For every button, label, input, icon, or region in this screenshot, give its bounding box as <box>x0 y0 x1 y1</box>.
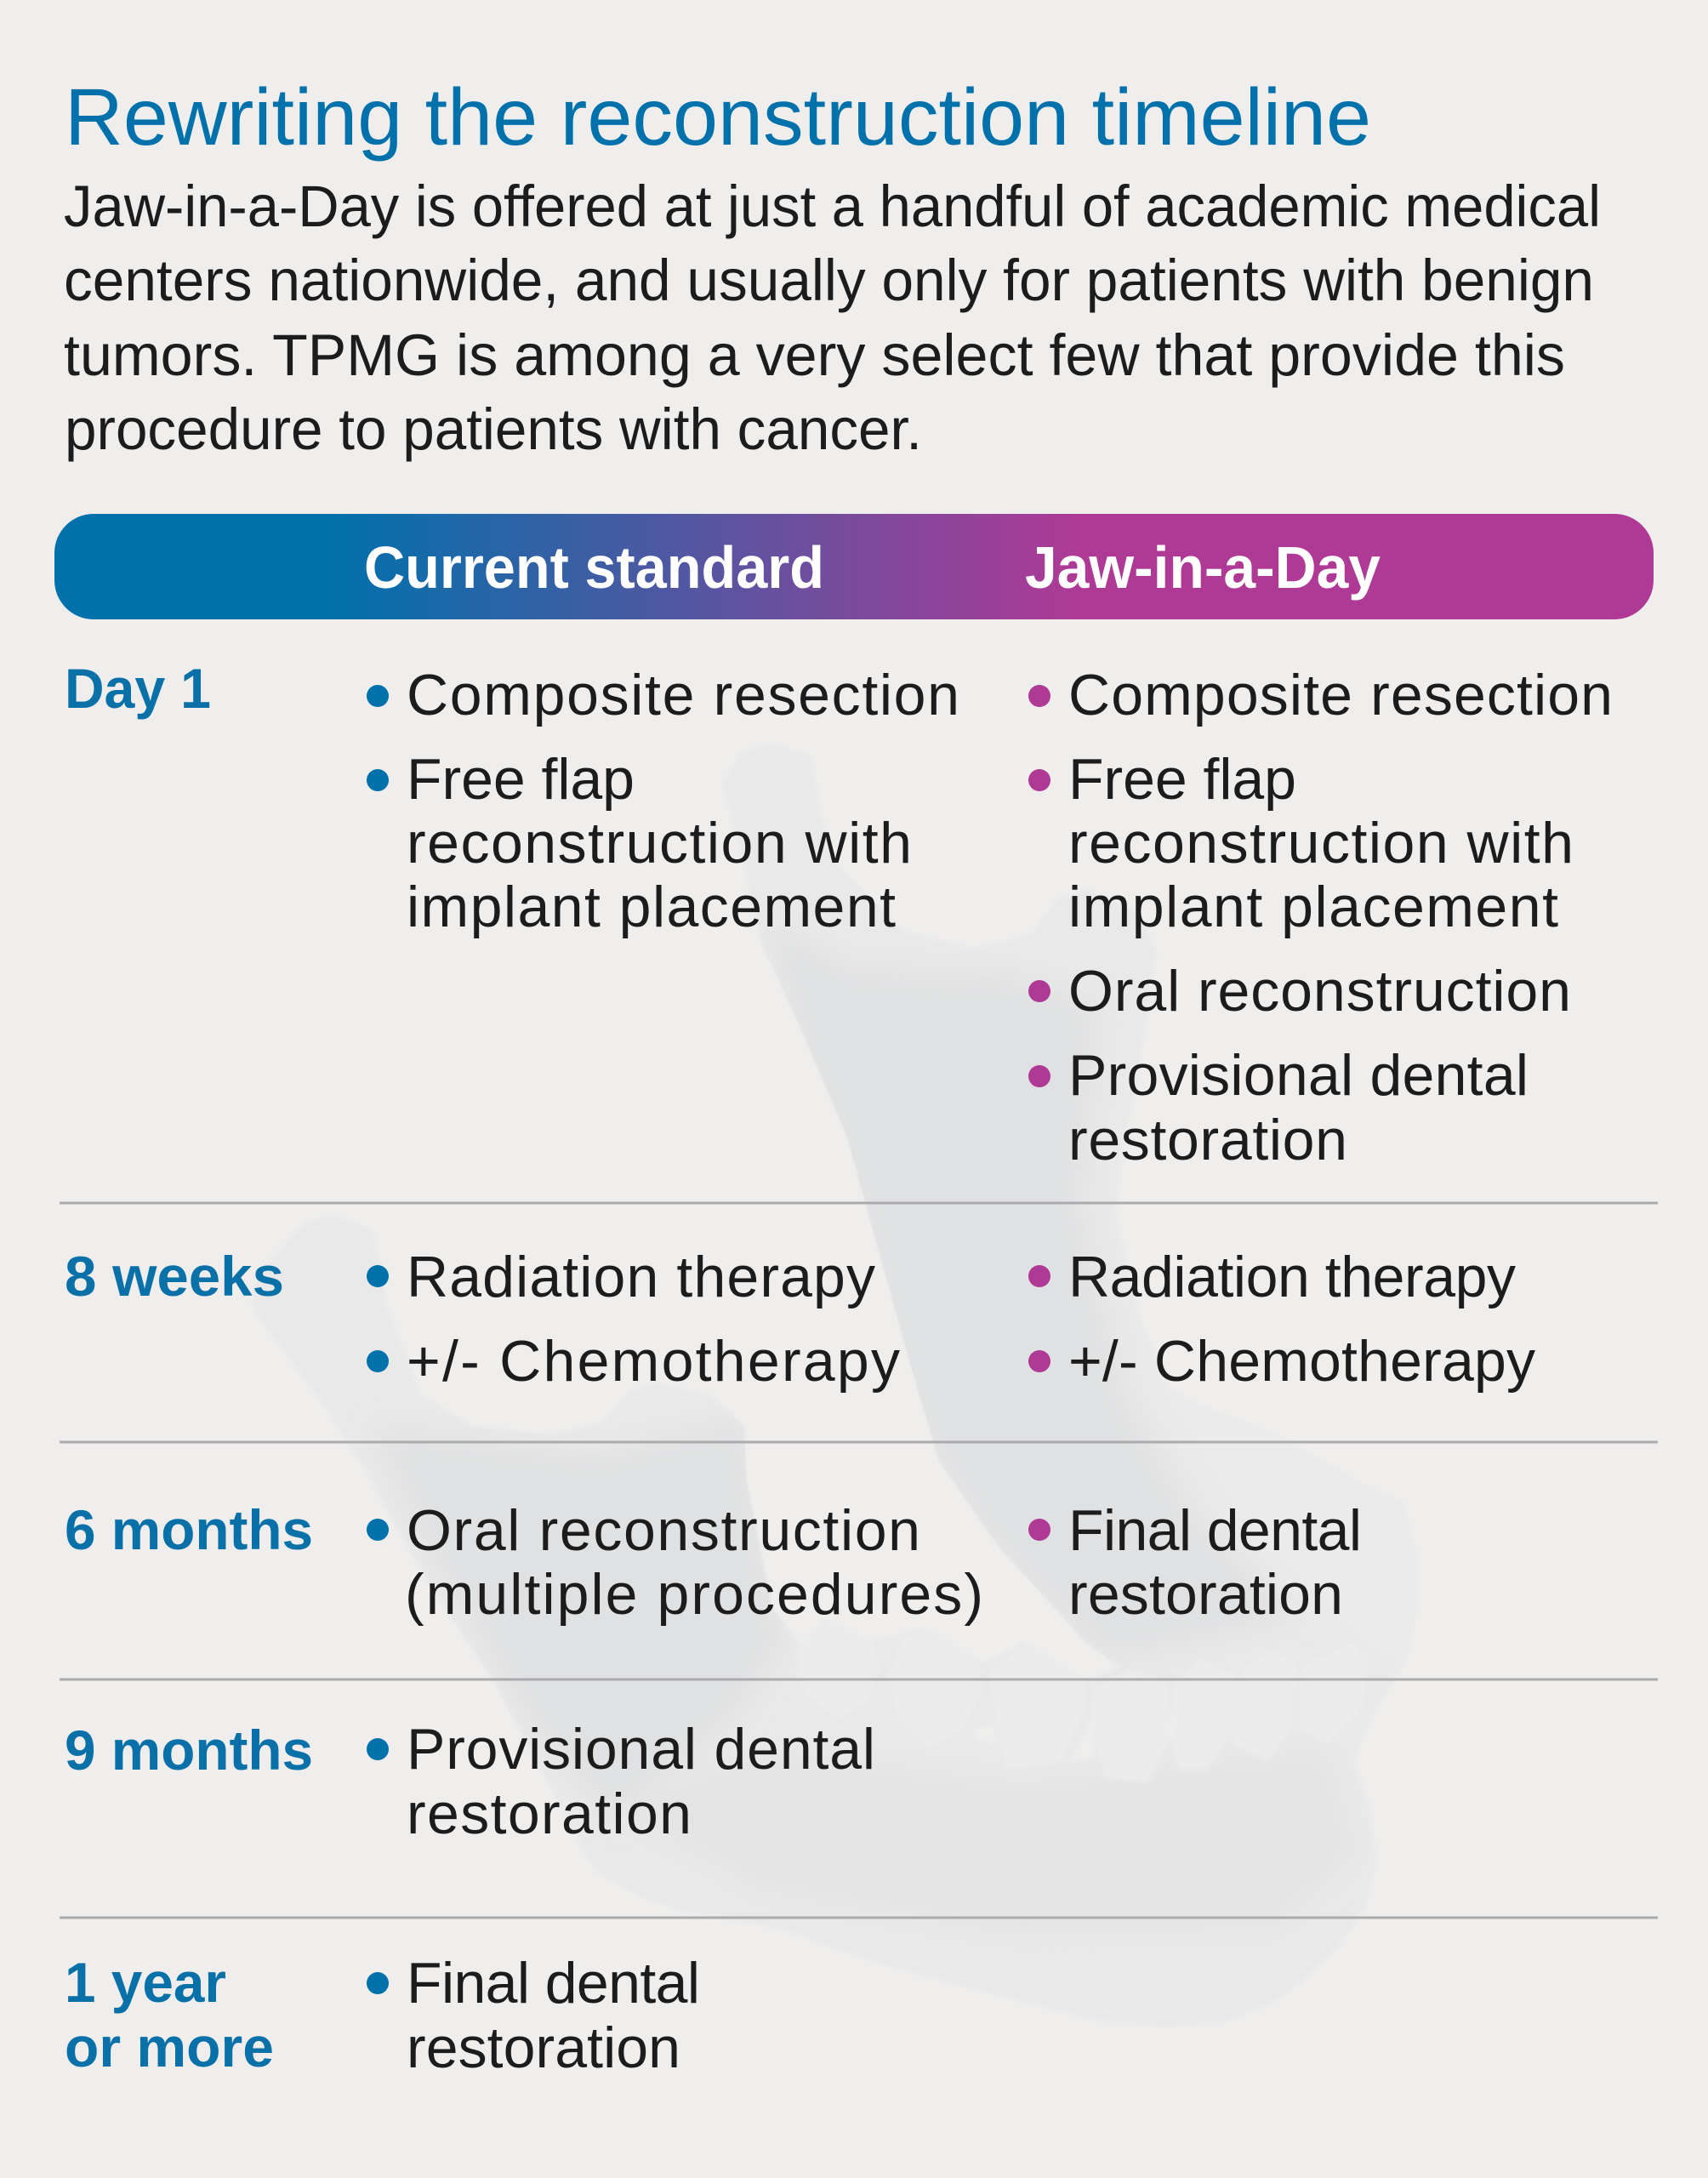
label: 1 year or more <box>65 1951 274 2078</box>
current standard items, 9 months: Provisional dental <box>407 1717 875 1782</box>
jaw shading: far side, lighter <box>1131 1106 1446 1702</box>
jaw-in-a-day items, day 1: Provisional dental <box>1068 1043 1529 1108</box>
current standard items, 6 months: Oral reconstruction <box>407 1498 920 1563</box>
current standard items, 8 weeks: +/- Chemotherapy <box>407 1329 900 1394</box>
intro paragraph: centers nationwide, and usually only for patients with benign <box>64 248 1594 313</box>
header: current standard: Current standard <box>364 534 824 601</box>
jaw-in-a-day items, 6 months: Final dental <box>1068 1498 1362 1563</box>
current standard items, 9 months: restoration <box>407 1782 692 1846</box>
current standard items, 6 months <box>367 1498 983 1627</box>
row: day 1 <box>65 657 1613 1172</box>
current standard items, 8 weeks: Radiation therapy <box>407 1245 875 1309</box>
jaw teeth <box>795 1621 1369 1782</box>
title: Rewriting the reconstruction timeline <box>65 72 1371 162</box>
current standard items, 9 months <box>367 1717 875 1846</box>
label: day 1: Day 1 <box>65 657 211 720</box>
current standard items, 1 year or more <box>367 1951 700 2080</box>
jaw shading: right ramus <box>798 965 1250 1637</box>
row: 9 months <box>65 1717 875 1846</box>
current standard items, 6 months: (multiple procedures) <box>405 1562 983 1627</box>
jaw-in-a-day items, 6 months: restoration <box>1068 1562 1343 1627</box>
current standard items, 8 weeks <box>367 1245 900 1394</box>
jaw-in-a-day items, day 1: Free flap <box>1068 747 1296 812</box>
row: 8 weeks <box>65 1245 1535 1394</box>
label: 1 year or more: or more <box>65 2016 274 2078</box>
current standard items, 1 year or more: restoration <box>407 2016 680 2080</box>
current standard items, day 1 <box>367 663 959 939</box>
current standard items, day 1: reconstruction with <box>407 811 912 875</box>
intro paragraph: tumors. TPMG is among a very select few that provide this <box>64 322 1565 388</box>
jaw-in-a-day items, 8 weeks: Radiation therapy <box>1068 1245 1516 1309</box>
row: 6 months <box>65 1498 1362 1627</box>
current standard items, day 1: Composite resection <box>407 663 959 727</box>
jaw shading, clipped to the silhouette <box>374 919 1446 1931</box>
label: 6 months: 6 months <box>65 1498 313 1561</box>
current standard items, day 1: Free flap <box>407 747 635 812</box>
current standard items, 1 year or more: Final dental <box>407 1951 700 2016</box>
jaw-in-a-day items, 8 weeks <box>1028 1245 1535 1394</box>
background image: jawbone <box>374 923 1350 1933</box>
current standard items, day 1: implant placement <box>407 875 896 939</box>
jaw-in-a-day items, day 1: reconstruction with <box>1068 811 1574 875</box>
label: 1 year or more: 1 year <box>65 1951 226 2014</box>
jaw-in-a-day items, day 1: implant placement <box>1068 875 1558 939</box>
header: jaw-in-a-day: Jaw-in-a-Day <box>1025 534 1381 601</box>
jaw-in-a-day items, day 1: restoration <box>1068 1108 1347 1172</box>
jaw shading: lower body <box>612 1753 1352 1931</box>
jaw tooth gaps <box>973 1706 1176 1761</box>
jaw-in-a-day items, day 1: Oral reconstruction <box>1068 959 1571 1023</box>
jaw-in-a-day items, 6 months <box>1028 1498 1362 1627</box>
jaw-in-a-day items, day 1 <box>1028 663 1613 1172</box>
intro paragraph: Jaw-in-a-Day is offered at just a handful of academic medical <box>64 174 1601 239</box>
table header bar <box>54 514 1654 619</box>
intro paragraph <box>64 174 1601 462</box>
jaw-in-a-day items, 8 weeks: +/- Chemotherapy <box>1068 1329 1535 1394</box>
row: 1 year or more <box>65 1951 700 2080</box>
intro paragraph: procedure to patients with cancer. <box>65 396 922 462</box>
jaw shading: left ramus <box>408 1445 760 1789</box>
label: 8 weeks: 8 weeks <box>65 1245 284 1308</box>
label: 9 months: 9 months <box>65 1719 313 1782</box>
jaw-in-a-day items, day 1: Composite resection <box>1068 663 1613 727</box>
